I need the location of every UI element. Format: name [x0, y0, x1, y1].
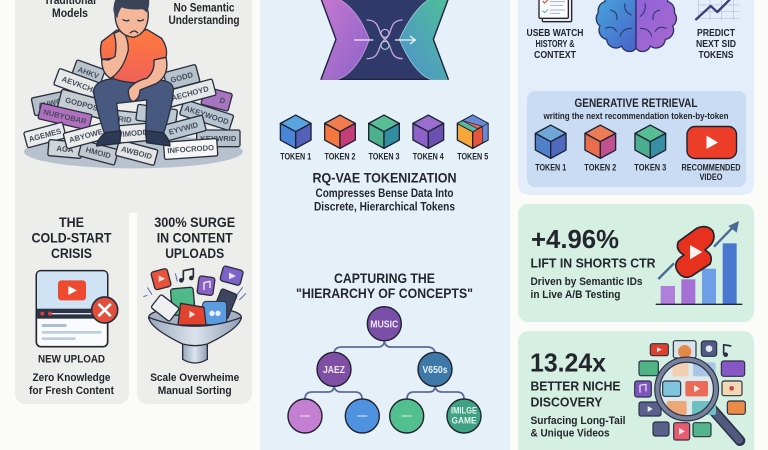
node: music: MUSIC	[370, 319, 398, 330]
labels: retrieval tokens: TOKEN 2	[584, 162, 616, 172]
heading: traditional models: Models	[52, 8, 88, 20]
heading: generative retrieval: GENERATIVE RETRIEVAL	[574, 98, 698, 110]
panel: generative model	[518, 0, 754, 195]
heading: cold-start crisis: THE	[59, 215, 84, 230]
heading: RQ-VAE tokenization: RQ-VAE TOKENIZATION	[312, 170, 456, 186]
token 2 cube	[325, 115, 355, 148]
token labels	[280, 152, 488, 162]
token 1 cube	[535, 125, 566, 158]
token 2 cube	[585, 125, 616, 158]
labels: retrieval tokens: VIDEO	[700, 172, 723, 182]
label: user watch history: CONTEXT	[534, 50, 576, 61]
heading: hierarchy of concepts: "HIERARCHY OF CONCEPTS"	[296, 285, 473, 301]
heading: no semantic understanding: Understanding	[168, 15, 240, 27]
token labels: TOKEN 5	[457, 152, 488, 162]
label: predict next sid tokens	[696, 28, 736, 61]
panel: content upload surge	[143, 215, 246, 397]
chart: rising bars with shorts logo	[656, 221, 742, 304]
caption: semantic ids: Driven by Semantic IDs	[530, 276, 642, 288]
heading: traditional models	[44, 0, 96, 20]
panel: semantic ID tokenization	[260, 0, 510, 450]
label: predict next sid tokens: NEXT SID	[696, 39, 736, 50]
panel: shorts CTR lift	[518, 204, 754, 322]
illustration: man on keyword pile: INFOCRODO	[167, 143, 214, 155]
illustration: man on keyword pile: WIMODD	[115, 128, 149, 139]
node: leaf purple	[288, 399, 322, 433]
token 5 cube	[457, 115, 488, 148]
label: new upload: NEW UPLOAD	[38, 354, 105, 366]
heading: hierarchy of concepts: CAPTURING THE	[334, 270, 435, 286]
caption: semantic ids	[530, 276, 642, 301]
node: leaf blue	[345, 399, 379, 433]
icon: magnifier over video mosaic	[635, 341, 745, 441]
token 1 cube	[280, 115, 311, 148]
shirt	[100, 29, 167, 83]
stat: 13.24x: 13.24x	[530, 348, 607, 378]
caption: zero knowledge: for Fresh Content	[29, 385, 114, 397]
node: jazz: JAEZ	[323, 365, 345, 376]
token labels: TOKEN 2	[324, 152, 356, 162]
caption: zero knowledge: Zero Knowledge	[32, 372, 110, 384]
label: predict next sid tokens: TOKENS	[698, 50, 734, 61]
heading: 300% surge: 300% SURGE	[154, 215, 235, 230]
illustration: man on keyword pile: KEYWRID	[200, 134, 237, 143]
boots	[97, 131, 121, 146]
illustration: man on keyword pile: AECHOYD	[170, 84, 210, 103]
illustration: man on keyword pile: GODD	[169, 70, 194, 85]
jeans	[93, 79, 173, 135]
text: tokenization description	[314, 188, 455, 214]
node: music	[367, 307, 401, 341]
heading: cold-start crisis: COLD-START	[32, 230, 112, 246]
icon: rising token chart	[695, 0, 739, 20]
caption: surfacing long-tail: Surfacing Long-Tail	[530, 415, 626, 427]
caption: surfacing long-tail	[530, 415, 626, 440]
token 3 cube	[369, 115, 399, 148]
label: better niche discovery	[530, 379, 621, 410]
illustration: man on keyword pile	[24, 0, 243, 168]
illustration: man on keyword pile: VD	[151, 110, 163, 120]
caption: surfacing long-tail: & Unique Videos	[530, 428, 610, 440]
token labels: TOKEN 1	[280, 152, 311, 162]
icon: brain	[596, 0, 676, 51]
illustration: man on keyword pile: AGA	[56, 144, 74, 154]
label: better niche discovery: BETTER NICHE	[530, 379, 621, 394]
illustration: man on keyword pile: GODPOS	[64, 95, 99, 113]
illustration: man on keyword pile: ABYOWES	[68, 126, 109, 145]
node: 1950s: V650s	[422, 365, 448, 376]
label: predict next sid tokens: PREDICT	[697, 28, 735, 39]
text: tokenization description: Discrete, Hierarchical Tokens	[314, 202, 455, 214]
panel: problem with traditional models	[15, 0, 252, 404]
caption: scale overwhelms	[150, 372, 239, 397]
token 3 cube	[635, 125, 666, 158]
heading: no semantic understanding: No Semantic	[174, 2, 235, 14]
illustration: man on keyword pile: AHKV	[77, 65, 101, 81]
icon: watch history checklist	[539, 0, 572, 22]
heading: hierarchy of concepts	[296, 270, 473, 301]
subheading: token by token: writing the next recommendation token-by-token	[543, 111, 728, 121]
caption: zero knowledge	[29, 372, 114, 397]
panel: niche discovery	[518, 331, 754, 450]
token 4 cube	[413, 115, 444, 148]
token labels: TOKEN 3	[368, 152, 400, 162]
heading: 300% surge: IN CONTENT	[157, 230, 233, 246]
illustration: man on keyword pile: AHWO	[37, 97, 63, 110]
label: user watch history	[526, 28, 584, 61]
illustration: man on keyword pile: AGEMES	[28, 127, 62, 144]
token row	[280, 115, 488, 162]
illustration: man on keyword pile: EYVWID	[168, 120, 200, 137]
node: image game: GAME	[452, 416, 476, 426]
label: lift in shorts ctr: LIFT IN SHORTS CTR	[530, 256, 656, 271]
panel: cold-start crisis	[29, 215, 118, 397]
heading: cold-start crisis	[32, 215, 112, 261]
head	[115, 5, 148, 37]
illustration: man on keyword pile: RID	[118, 114, 132, 125]
illustration: man on keyword pile: HMOID	[85, 145, 112, 161]
label: user watch history: HISTORY &	[536, 39, 574, 50]
node: image game	[447, 399, 481, 433]
heading: no semantic understanding	[168, 2, 240, 27]
illustration: man on keyword pile: AKEYWOOD	[183, 104, 230, 127]
label: better niche discovery: DISCOVERY	[530, 395, 603, 410]
caption: semantic ids: in Live A/B Testing	[530, 289, 620, 301]
illustration: man on keyword pile: NUBYOBAR	[42, 107, 88, 126]
token labels: TOKEN 4	[413, 152, 444, 162]
icon: new upload video card	[36, 271, 118, 347]
label: user watch history: USEB WATCH	[526, 28, 584, 39]
stat: +4.96%: +4.96%	[531, 224, 619, 254]
node: 1950s	[418, 352, 452, 386]
caption: scale overwhelms: Manual Sorting	[158, 385, 232, 397]
text: tokenization description: Compresses Bense Data Into	[316, 188, 454, 200]
heading: 300% surge: UPLOADS	[165, 246, 224, 261]
labels: retrieval tokens: RECOMMENDED	[682, 162, 740, 172]
icon: recommended video	[687, 126, 736, 158]
labels: retrieval tokens: TOKEN 1	[535, 162, 566, 172]
panel: generative retrieval	[527, 91, 746, 187]
arms	[102, 30, 128, 78]
diagram: RQ-VAE encoder decoder	[321, 0, 448, 79]
illustration: man on keyword pile: AWBOID	[120, 144, 153, 161]
icon: content funnel	[143, 266, 246, 363]
caption: scale overwhelms: Scale Overwheime	[150, 372, 239, 384]
node: image game: IMILGE	[451, 406, 477, 416]
chart: concept tree	[288, 307, 481, 433]
illustration: man on keyword pile: AEVKCHD	[61, 74, 100, 96]
labels: retrieval tokens	[535, 162, 740, 182]
node: leaf green	[390, 399, 424, 433]
illustration: man on keyword pile: D	[219, 96, 227, 106]
labels: retrieval tokens: TOKEN 3	[634, 162, 666, 172]
heading: 300% surge	[154, 215, 235, 261]
node: jazz	[317, 352, 351, 386]
heading: cold-start crisis: CRISIS	[51, 246, 92, 261]
